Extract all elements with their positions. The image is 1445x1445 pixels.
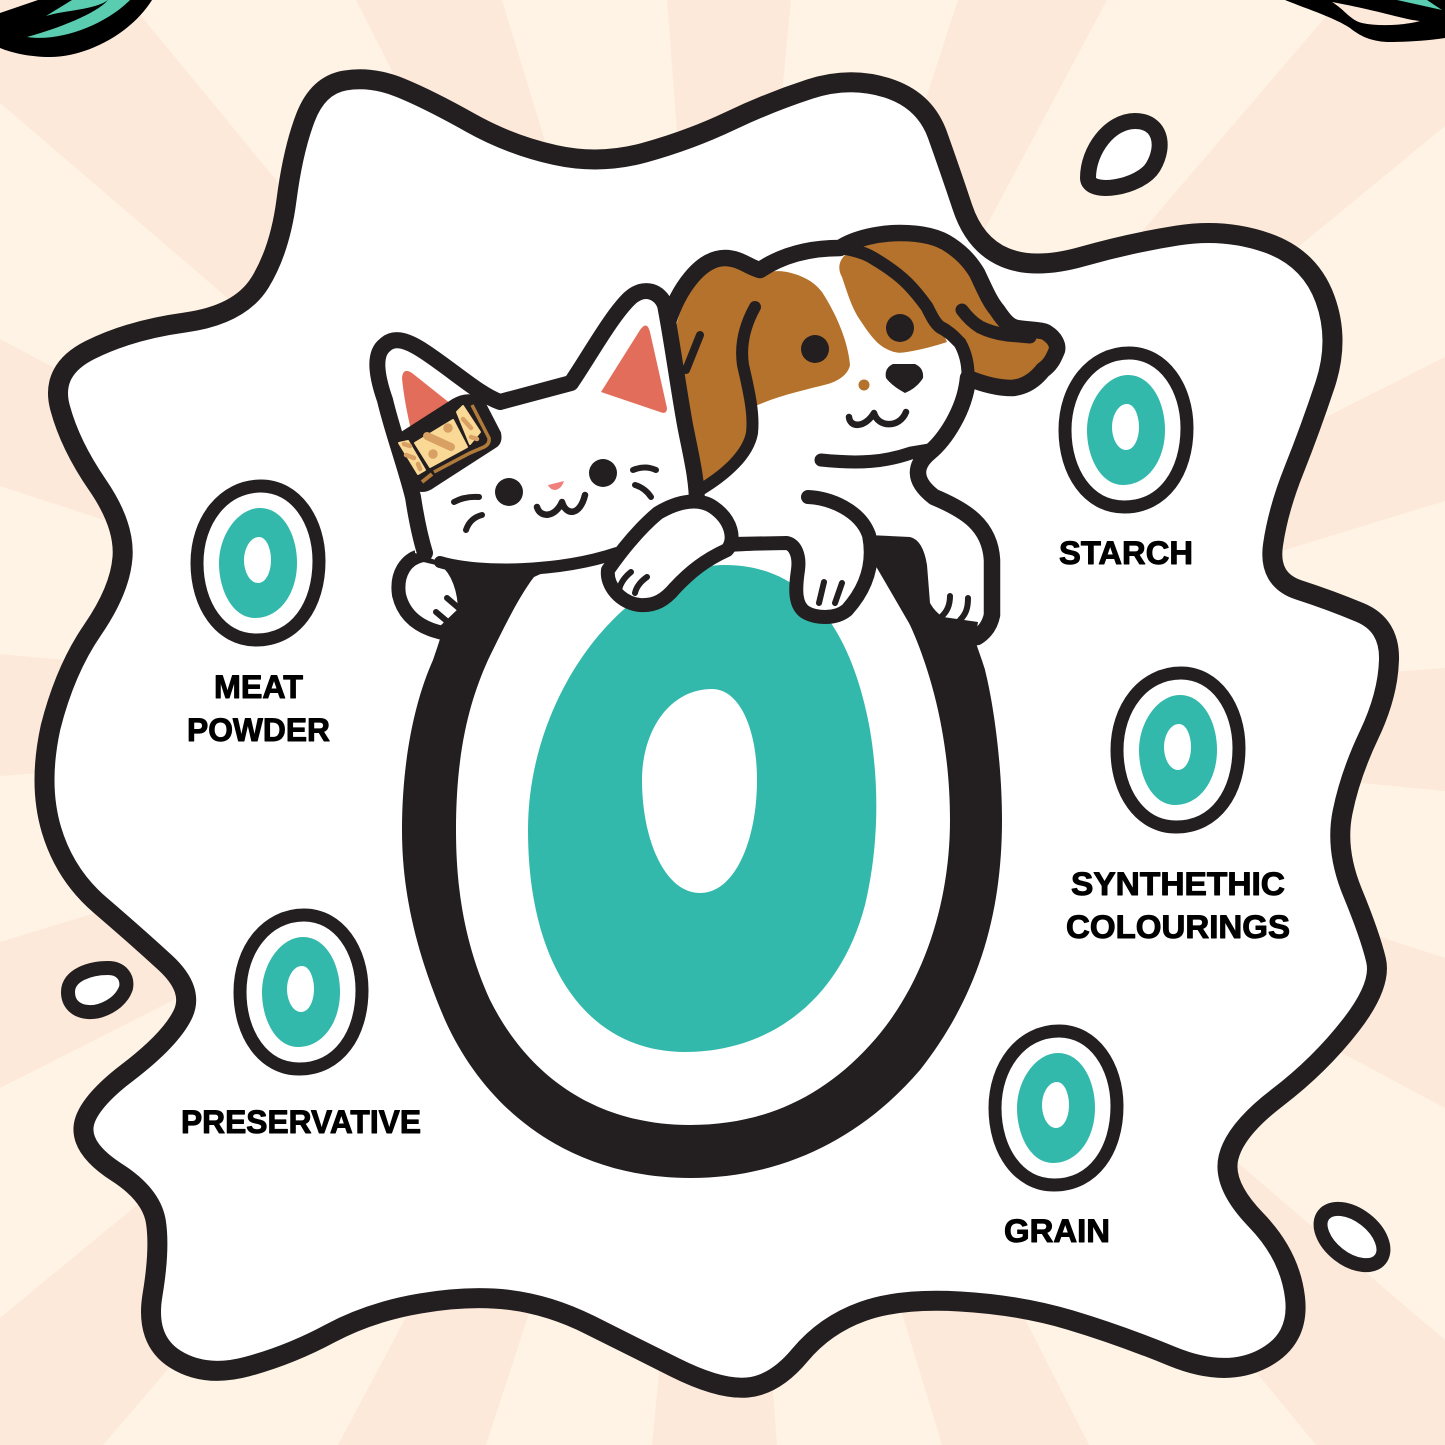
ingredient: grain — [995, 1031, 1117, 1249]
dog — [668, 233, 1057, 670]
cat — [377, 291, 732, 633]
cat back paw — [398, 555, 465, 633]
leaf: top right corner — [1285, 0, 1445, 42]
dog body fill — [675, 233, 1057, 640]
kibble bar on cat ear — [398, 396, 500, 490]
cat mouth — [537, 495, 585, 515]
cat ear pink right — [601, 325, 667, 413]
large central kibble ring — [402, 537, 1002, 1178]
dog jaw line — [821, 450, 929, 462]
ingredient: grain: GRAIN — [1004, 1213, 1110, 1249]
droplet: left — [68, 968, 126, 1012]
dog near paw fill — [700, 497, 871, 616]
dog left ear line — [700, 307, 755, 490]
cat arm claws — [619, 572, 647, 593]
ingredient: starch — [1059, 353, 1193, 571]
cat eyes — [495, 459, 617, 506]
cat back paw claws — [436, 598, 461, 623]
ingredient: meat powder — [187, 486, 330, 748]
ingredient: preservative: PRESERVATIVE — [181, 1104, 421, 1140]
dog near paw outline — [732, 497, 871, 617]
cat chin — [440, 553, 617, 569]
ingredient: synthetic colourings — [1066, 673, 1290, 945]
dog freckle — [858, 380, 870, 390]
dog nose — [886, 364, 923, 393]
cat ear pink left — [402, 371, 456, 430]
dog brown head patch and ear — [675, 258, 850, 490]
cat whiskers — [454, 468, 656, 530]
cat front arm — [608, 501, 732, 605]
dog ear fold — [686, 335, 700, 370]
ingredient: preservative — [181, 915, 421, 1140]
ingredient: meat powder: POWDER — [187, 712, 330, 748]
ingredient: synthetic colourings: COLOURINGS — [1066, 909, 1290, 945]
dog paw claws — [819, 582, 968, 620]
dog eyes — [801, 314, 914, 363]
dog outline — [668, 233, 1057, 637]
dog head line — [842, 248, 968, 375]
dog brown eye patch — [839, 255, 947, 353]
droplet: bottom right — [1310, 1198, 1394, 1276]
cat outline — [377, 291, 697, 553]
leaf: top left corner — [0, 0, 152, 57]
ingredient: starch: STARCH — [1059, 535, 1193, 571]
black ring behind dog far paw — [868, 535, 985, 670]
cat body fill — [377, 291, 697, 571]
dog mouth — [849, 412, 906, 425]
ingredient: synthetic colourings: SYNTHETHIC — [1071, 866, 1285, 902]
droplet: top right — [1088, 121, 1160, 188]
ingredient: meat powder: MEAT — [214, 669, 303, 705]
dog right ear — [857, 233, 1057, 388]
cat nose — [548, 481, 564, 490]
dog ear flap line — [962, 310, 1030, 337]
